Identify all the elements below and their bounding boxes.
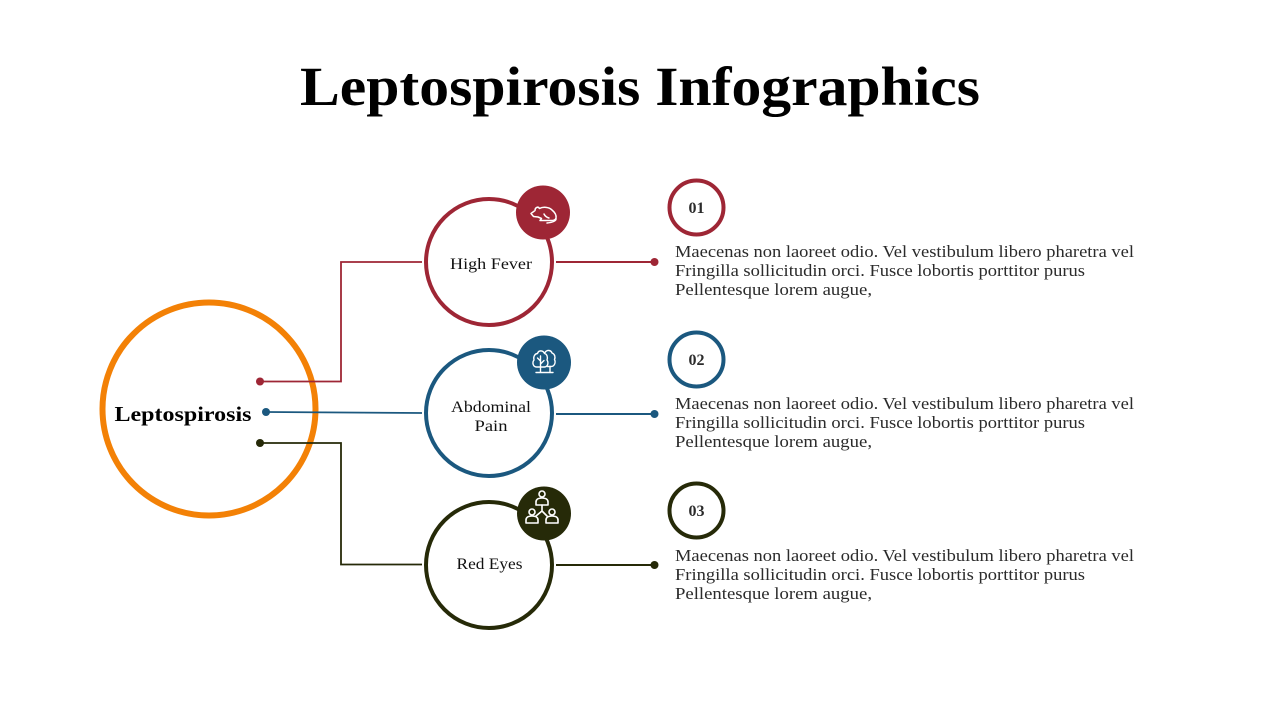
icon: trees xyxy=(517,336,571,390)
badge: 01: 01 xyxy=(688,200,704,217)
text block 03: Maecenas non laoreet odio. Vel vestibulum libero pharetra vel xyxy=(675,546,1134,565)
connector: centre to High Fever xyxy=(256,262,422,386)
text block 03 xyxy=(675,546,1134,603)
node: Red Eyes xyxy=(426,502,552,628)
text block 01: Pellentesque lorem augue, xyxy=(675,280,872,299)
text block 02: Pellentesque lorem augue, xyxy=(675,432,872,451)
title: Leptospirosis Infographics xyxy=(300,56,980,117)
central circle: Leptospirosis: Leptospirosis xyxy=(114,402,252,426)
node: Abdominal Pain: Abdominal xyxy=(451,399,532,416)
text block 03: Pellentesque lorem augue, xyxy=(675,584,872,603)
connector: centre to Abdominal Pain xyxy=(262,408,422,416)
node: High Fever: High Fever xyxy=(450,256,533,273)
node: Abdominal Pain: Pain xyxy=(474,418,508,435)
connector: Abdominal Pain to 02 xyxy=(556,410,658,418)
node: Red Eyes: Red Eyes xyxy=(456,556,522,573)
badge: 02: 02 xyxy=(688,352,704,369)
text block 01: Maecenas non laoreet odio. Vel vestibulum libero pharetra vel xyxy=(675,242,1134,261)
icon: rat xyxy=(516,186,570,240)
text block 02 xyxy=(675,394,1134,451)
connector: High Fever to 01 xyxy=(556,258,658,266)
icon: people hierarchy xyxy=(517,486,571,540)
connector: Red Eyes to 03 xyxy=(556,561,658,569)
badge: 02 xyxy=(670,332,724,386)
text block 01 xyxy=(675,242,1134,299)
node: High Fever xyxy=(426,199,552,325)
text block 03: Fringilla sollicitudin orci. Fusce lobortis porttitor purus xyxy=(675,565,1085,584)
text block 01: Fringilla sollicitudin orci. Fusce lobortis porttitor purus xyxy=(675,261,1085,280)
text block 02: Maecenas non laoreet odio. Vel vestibulum libero pharetra vel xyxy=(675,394,1134,413)
connector: centre to Red Eyes xyxy=(256,439,422,564)
badge: 03 xyxy=(670,484,724,538)
text block 02: Fringilla sollicitudin orci. Fusce lobortis porttitor purus xyxy=(675,413,1085,432)
central circle: Leptospirosis xyxy=(102,302,316,516)
node: Abdominal Pain xyxy=(426,350,552,476)
badge: 03: 03 xyxy=(688,503,704,520)
badge: 01 xyxy=(670,180,724,234)
